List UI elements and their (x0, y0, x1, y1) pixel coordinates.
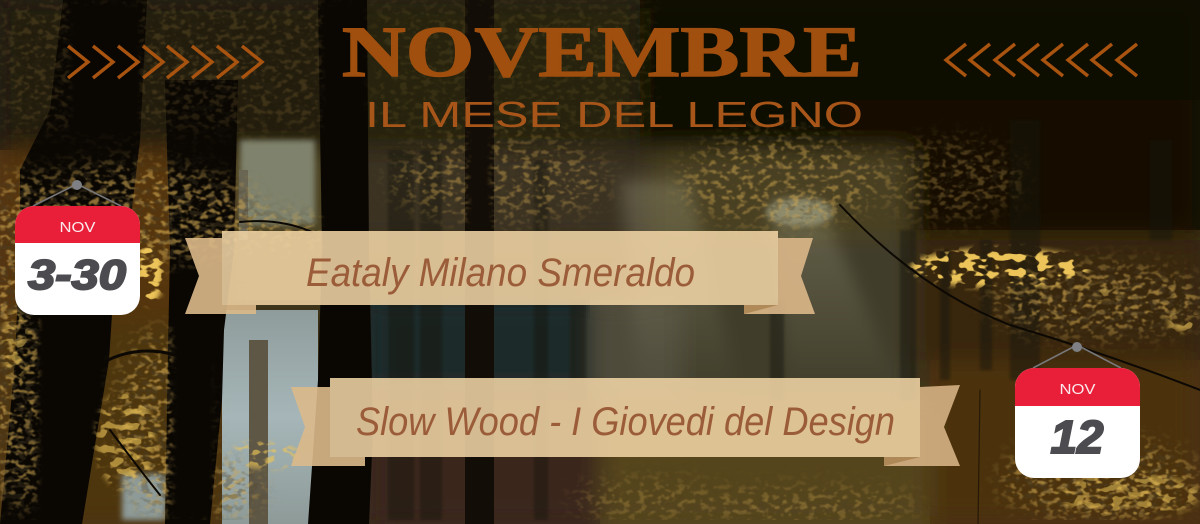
ribbon right tail (884, 385, 960, 466)
ribbon: Eataly Milano Smeraldo (185, 231, 815, 314)
ribbon fold shadow (744, 305, 778, 314)
ribbon: Slow Wood (291, 378, 960, 466)
ribbon left tail (185, 238, 256, 314)
hanger (1033, 345, 1121, 368)
calendar: Nov 3-30: NOV (60, 219, 96, 236)
calendar: Nov 12: 12 (1050, 411, 1104, 463)
calendar: Nov 12 (1015, 342, 1140, 478)
calendar: Nov 3-30 (15, 180, 140, 315)
left chevrons (68, 46, 262, 78)
calendar: Nov 3-30: 3-30 (28, 251, 126, 298)
title: NOVEMBRE (342, 12, 862, 92)
ribbon label: Slow Wood - I Giovedi del Design (356, 400, 895, 444)
ribbon band (330, 378, 920, 457)
ribbon band (222, 231, 778, 305)
hanger (33, 184, 121, 206)
ribbon left tail (291, 387, 365, 466)
ribbon right tail (744, 238, 815, 314)
right chevrons (946, 44, 1137, 76)
ribbon label: Eataly Milano Smeraldo (306, 251, 695, 295)
subtitle: IL MESE DEL LEGNO (365, 94, 863, 135)
ribbon fold shadow (884, 457, 920, 466)
calendar: Nov 12: NOV (1060, 381, 1096, 398)
